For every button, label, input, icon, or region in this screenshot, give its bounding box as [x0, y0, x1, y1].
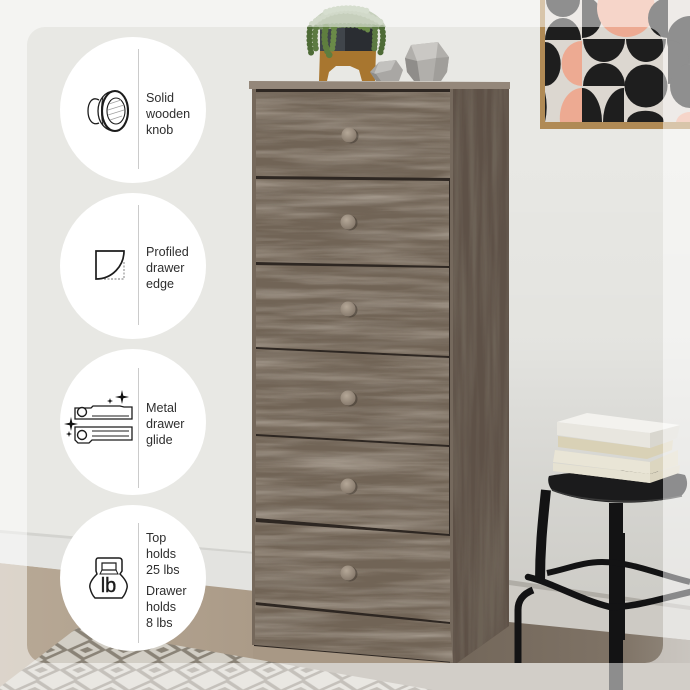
label: top and drawer weight limits: 8 lbs [146, 616, 173, 630]
feature badge: solid wooden knob [60, 37, 206, 183]
icon text: lb: lb [101, 575, 116, 597]
baseboard left [0, 530, 255, 591]
dresser top [249, 81, 510, 89]
large concrete geometric vase [405, 42, 449, 81]
label: top and drawer weight limits: 25 lbs Drawer [146, 563, 187, 598]
plant in pot on wooden stand [309, 6, 386, 81]
feature badge: profiled drawer edge [60, 193, 206, 339]
label: Solid wooden knob [146, 91, 190, 137]
feature badge: weight capacity [60, 505, 206, 651]
label: Solid wooden knob: Solid [146, 91, 174, 105]
label: top and drawer weight limits: holds [146, 600, 176, 614]
patterned rug [0, 628, 431, 690]
label: Solid wooden knob: wooden [146, 107, 190, 121]
label: Profiled drawer edge: edge [146, 277, 174, 291]
label: Metal drawer glide: drawer [146, 417, 184, 431]
icon: knob [87, 90, 130, 132]
feature badge: metal drawer glide [60, 349, 206, 495]
icon: drawer glides with sparkles [64, 390, 133, 444]
black metal stool [518, 471, 690, 690]
tall six-drawer dresser [249, 81, 510, 664]
stack of books [553, 413, 680, 483]
drawer knobs [340, 128, 358, 582]
small concrete geometric vase [370, 60, 403, 81]
label: Metal drawer glide [146, 401, 184, 447]
icon: kettlebell weight [89, 557, 128, 599]
dresser carcass [253, 89, 453, 663]
floor [0, 563, 253, 690]
label: top and drawer weight limits: holds [146, 547, 176, 561]
label: Profiled drawer edge: Profiled [146, 245, 189, 259]
baseboard right [509, 580, 690, 640]
label: top and drawer weight limits: Top [146, 531, 166, 545]
label: Profiled drawer edge: drawer [146, 261, 184, 275]
label: Metal drawer glide: glide [146, 433, 173, 447]
label: Solid wooden knob: knob [146, 123, 173, 137]
label: Profiled drawer edge [146, 245, 189, 291]
drawer fronts [250, 88, 456, 664]
artwork [540, 0, 690, 129]
label: Metal drawer glide: Metal [146, 401, 177, 415]
dresser side panel [453, 89, 509, 663]
icon: profiled edge [95, 250, 125, 280]
label: top and drawer weight limits [146, 531, 187, 630]
